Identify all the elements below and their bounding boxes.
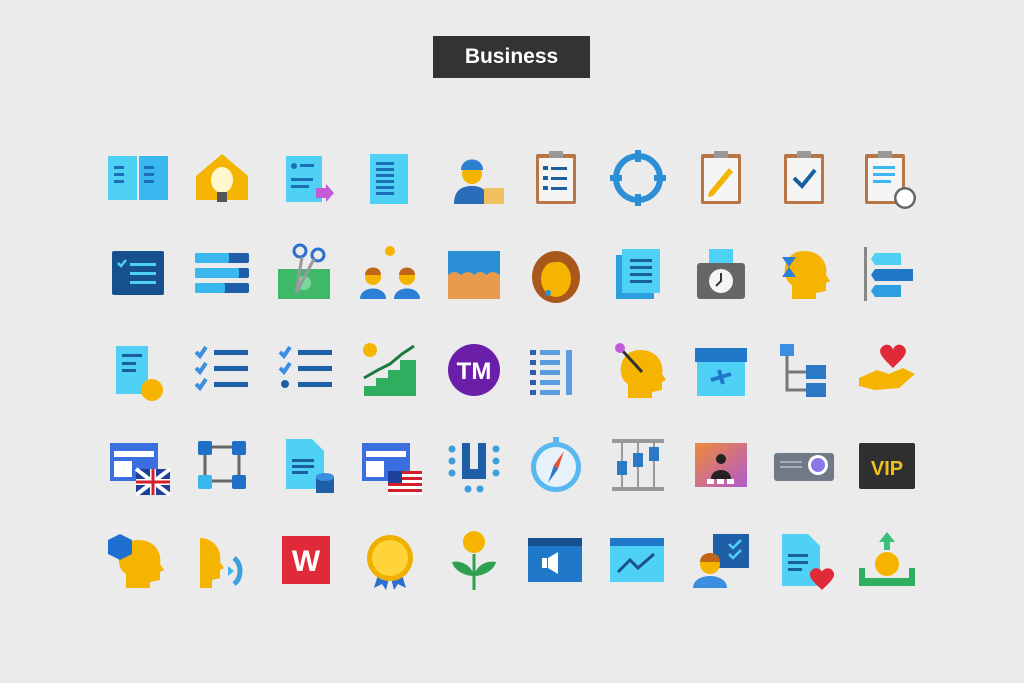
icon: coin tray upload [859, 532, 915, 586]
icon: clipboard list [536, 151, 576, 204]
icon: stacked bars [195, 253, 249, 293]
icon: clipboard check [784, 151, 824, 204]
icon: hand heart [859, 345, 915, 390]
title: Business [465, 45, 558, 68]
icon: table list [530, 350, 572, 395]
icon: house bulb [196, 154, 248, 202]
icon: open book [108, 156, 168, 200]
icon: head voice [200, 538, 240, 588]
icon: vip: VIP [871, 458, 903, 480]
icon: clipboard clock [865, 151, 916, 209]
icon: window us [362, 443, 422, 495]
icon: travel shop [695, 348, 747, 396]
icon: resume arrow [286, 156, 334, 202]
icon: support woman [532, 251, 580, 303]
icon: checklist partial [280, 347, 332, 388]
icon: projector [774, 453, 834, 481]
icon: window uk [110, 443, 170, 495]
icon: growth chart [363, 343, 416, 396]
icon: document database [286, 439, 334, 493]
icon: checklist board [112, 251, 164, 295]
icon: time clock card [697, 249, 745, 299]
icon: scissors money [278, 245, 330, 299]
icon: document list [370, 154, 408, 204]
icon: money plant [452, 531, 496, 590]
icon: abacus [612, 439, 664, 491]
icon: checklist [196, 347, 248, 388]
icon: target [610, 150, 666, 206]
icon: word W [282, 536, 330, 584]
icon: video call [695, 443, 747, 487]
icon: browser chart [610, 538, 664, 582]
icon: clipboard pencil [701, 151, 741, 204]
icon: meeting table [448, 443, 500, 492]
icon: word W: W [292, 545, 321, 578]
icon: trademark [448, 344, 500, 396]
icon: head hourglass [782, 251, 830, 299]
icon: document heart [782, 534, 834, 590]
icon: browser megaphone [528, 538, 582, 582]
icon: head magic wand [615, 343, 666, 398]
icon: vip [859, 443, 915, 489]
icon: team idea [360, 246, 420, 299]
icon: head cube [108, 534, 164, 588]
icon: shop [448, 251, 500, 299]
icon: trademark: TM [457, 358, 491, 385]
icon: delivery man [454, 160, 504, 204]
icon: person checklist [693, 534, 749, 588]
title [433, 36, 590, 78]
icon: award [367, 535, 413, 590]
icon: document copy [616, 249, 660, 299]
icon: hierarchy [780, 344, 826, 397]
icon: timeline tags [864, 247, 913, 301]
icon: nodes square [198, 441, 246, 489]
icon: receipt coin [116, 346, 163, 401]
icon: compass [531, 437, 581, 492]
